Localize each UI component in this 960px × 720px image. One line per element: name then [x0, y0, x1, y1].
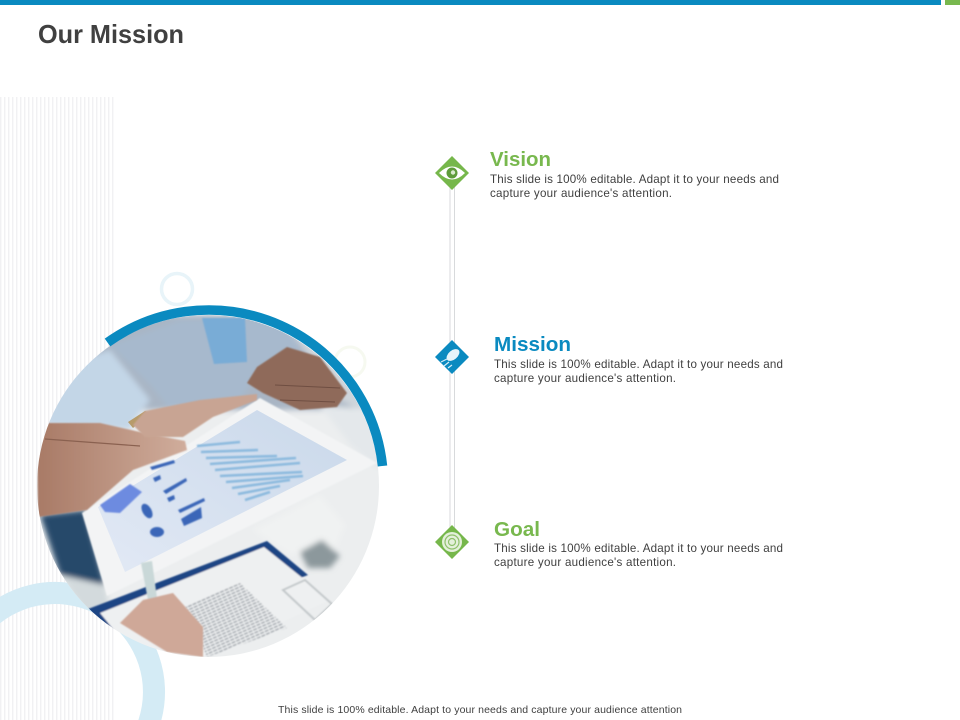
icon: rocket diamond	[435, 340, 469, 374]
description: vision: This slide is 100% editable. Adapt it to your needs and	[490, 173, 779, 186]
icon: target diamond	[435, 525, 469, 559]
footer note: This slide is 100% editable. Adapt to your needs and capture your audience attention	[278, 704, 682, 716]
description: goal: This slide is 100% editable. Adapt it to your needs and	[494, 542, 783, 555]
timeline connector	[450, 186, 454, 530]
decorative striped panel	[0, 97, 114, 720]
clipboard and paper	[88, 541, 332, 657]
item: goal	[435, 519, 783, 569]
description: mission: This slide is 100% editable. Adapt it to your needs and	[494, 358, 783, 371]
writing hand and pen	[120, 561, 203, 657]
resting hand	[133, 394, 257, 437]
pointing hand	[37, 423, 187, 517]
description: mission: capture your audience's attention.	[494, 372, 676, 385]
item: vision	[435, 149, 779, 200]
icon: eye diamond	[435, 156, 469, 190]
decorative rings	[0, 274, 365, 720]
item: mission	[435, 334, 783, 385]
tablet charts	[100, 442, 303, 537]
tablet frame	[82, 398, 377, 596]
heading: goal: Goal	[494, 519, 540, 541]
tablet screen	[98, 410, 347, 572]
title: Our Mission	[38, 19, 184, 49]
blue arc	[108, 310, 382, 466]
heading: mission: Mission	[494, 334, 571, 356]
seated person's hand	[247, 347, 347, 410]
wristwatch	[128, 411, 146, 428]
description: goal: capture your audience's attention.	[494, 556, 676, 569]
photo: business people reviewing charts on a tablet	[37, 315, 379, 657]
description: vision: capture your audience's attention.	[490, 187, 672, 200]
necktie	[202, 318, 247, 364]
heading: vision: Vision	[490, 149, 551, 171]
top accent bar	[0, 0, 960, 5]
